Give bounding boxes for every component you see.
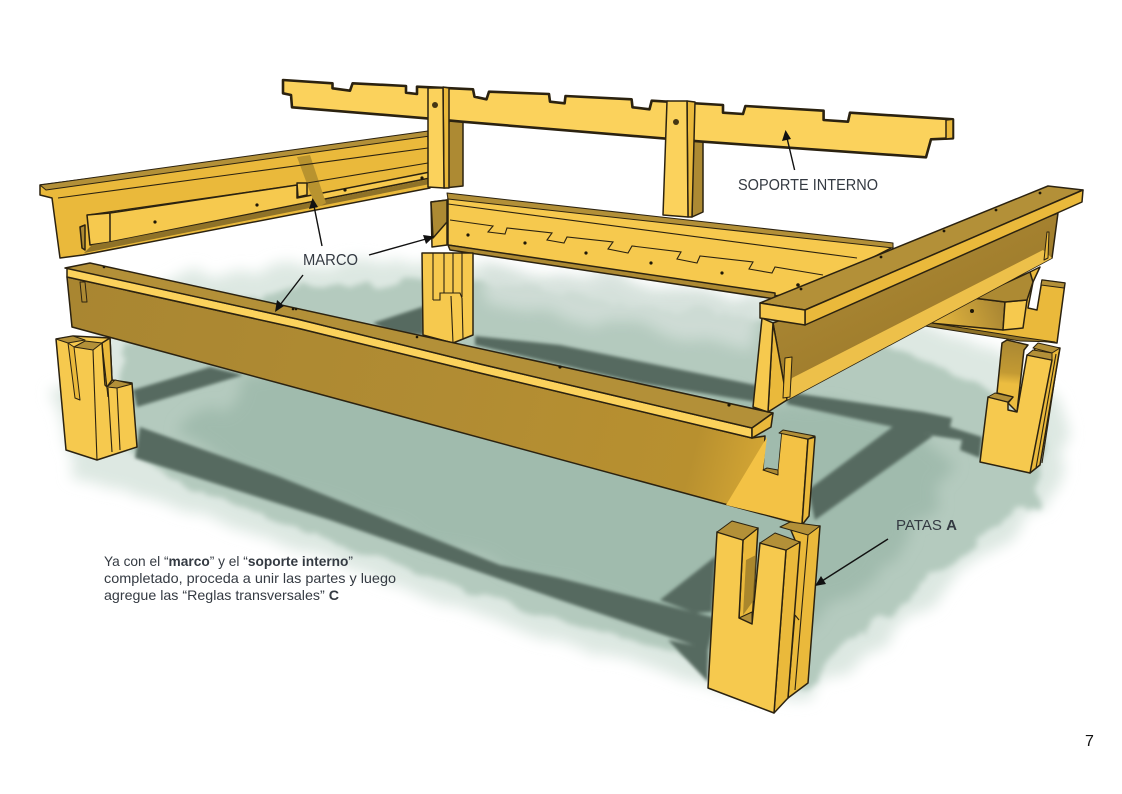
page number: 7 (1085, 733, 1094, 750)
label: marco: MARCO (303, 252, 358, 269)
panel: marco trasero (431, 193, 893, 299)
panel: pieza trasera derecha (925, 267, 1065, 343)
panel: marco delantero (65, 263, 815, 525)
text block: instrucciones: Ya con el “marco” y el “soporte interno” (104, 553, 353, 569)
text block: instrucciones: agregue las “Reglas transversales” C (104, 587, 339, 603)
label: patas A (815, 517, 957, 586)
leg back faces (444, 121, 463, 188)
ground watercolor shadow (52, 260, 1072, 702)
panel: pata delantera izquierda (56, 336, 137, 460)
panel: marco derecho (753, 186, 1083, 412)
label: soporte interno: SOPORTE INTERNO (738, 177, 878, 194)
text block: instrucciones: completado, proceda a unir las partes y luego (104, 570, 396, 586)
label: soporte interno (738, 130, 878, 194)
panel: pata central (422, 253, 473, 343)
panel: marco trasero izquierdo (40, 131, 430, 258)
label: patas A: PATAS A (896, 517, 957, 534)
panel: soporte interno (283, 80, 953, 217)
panel: pata trasera derecha (980, 340, 1060, 473)
cast shadows on the ground (133, 306, 982, 682)
panel: pata delantera derecha (708, 521, 820, 713)
text block: instrucciones (104, 553, 396, 603)
arrow: soporte interno (782, 130, 795, 170)
label: marco (275, 198, 434, 312)
